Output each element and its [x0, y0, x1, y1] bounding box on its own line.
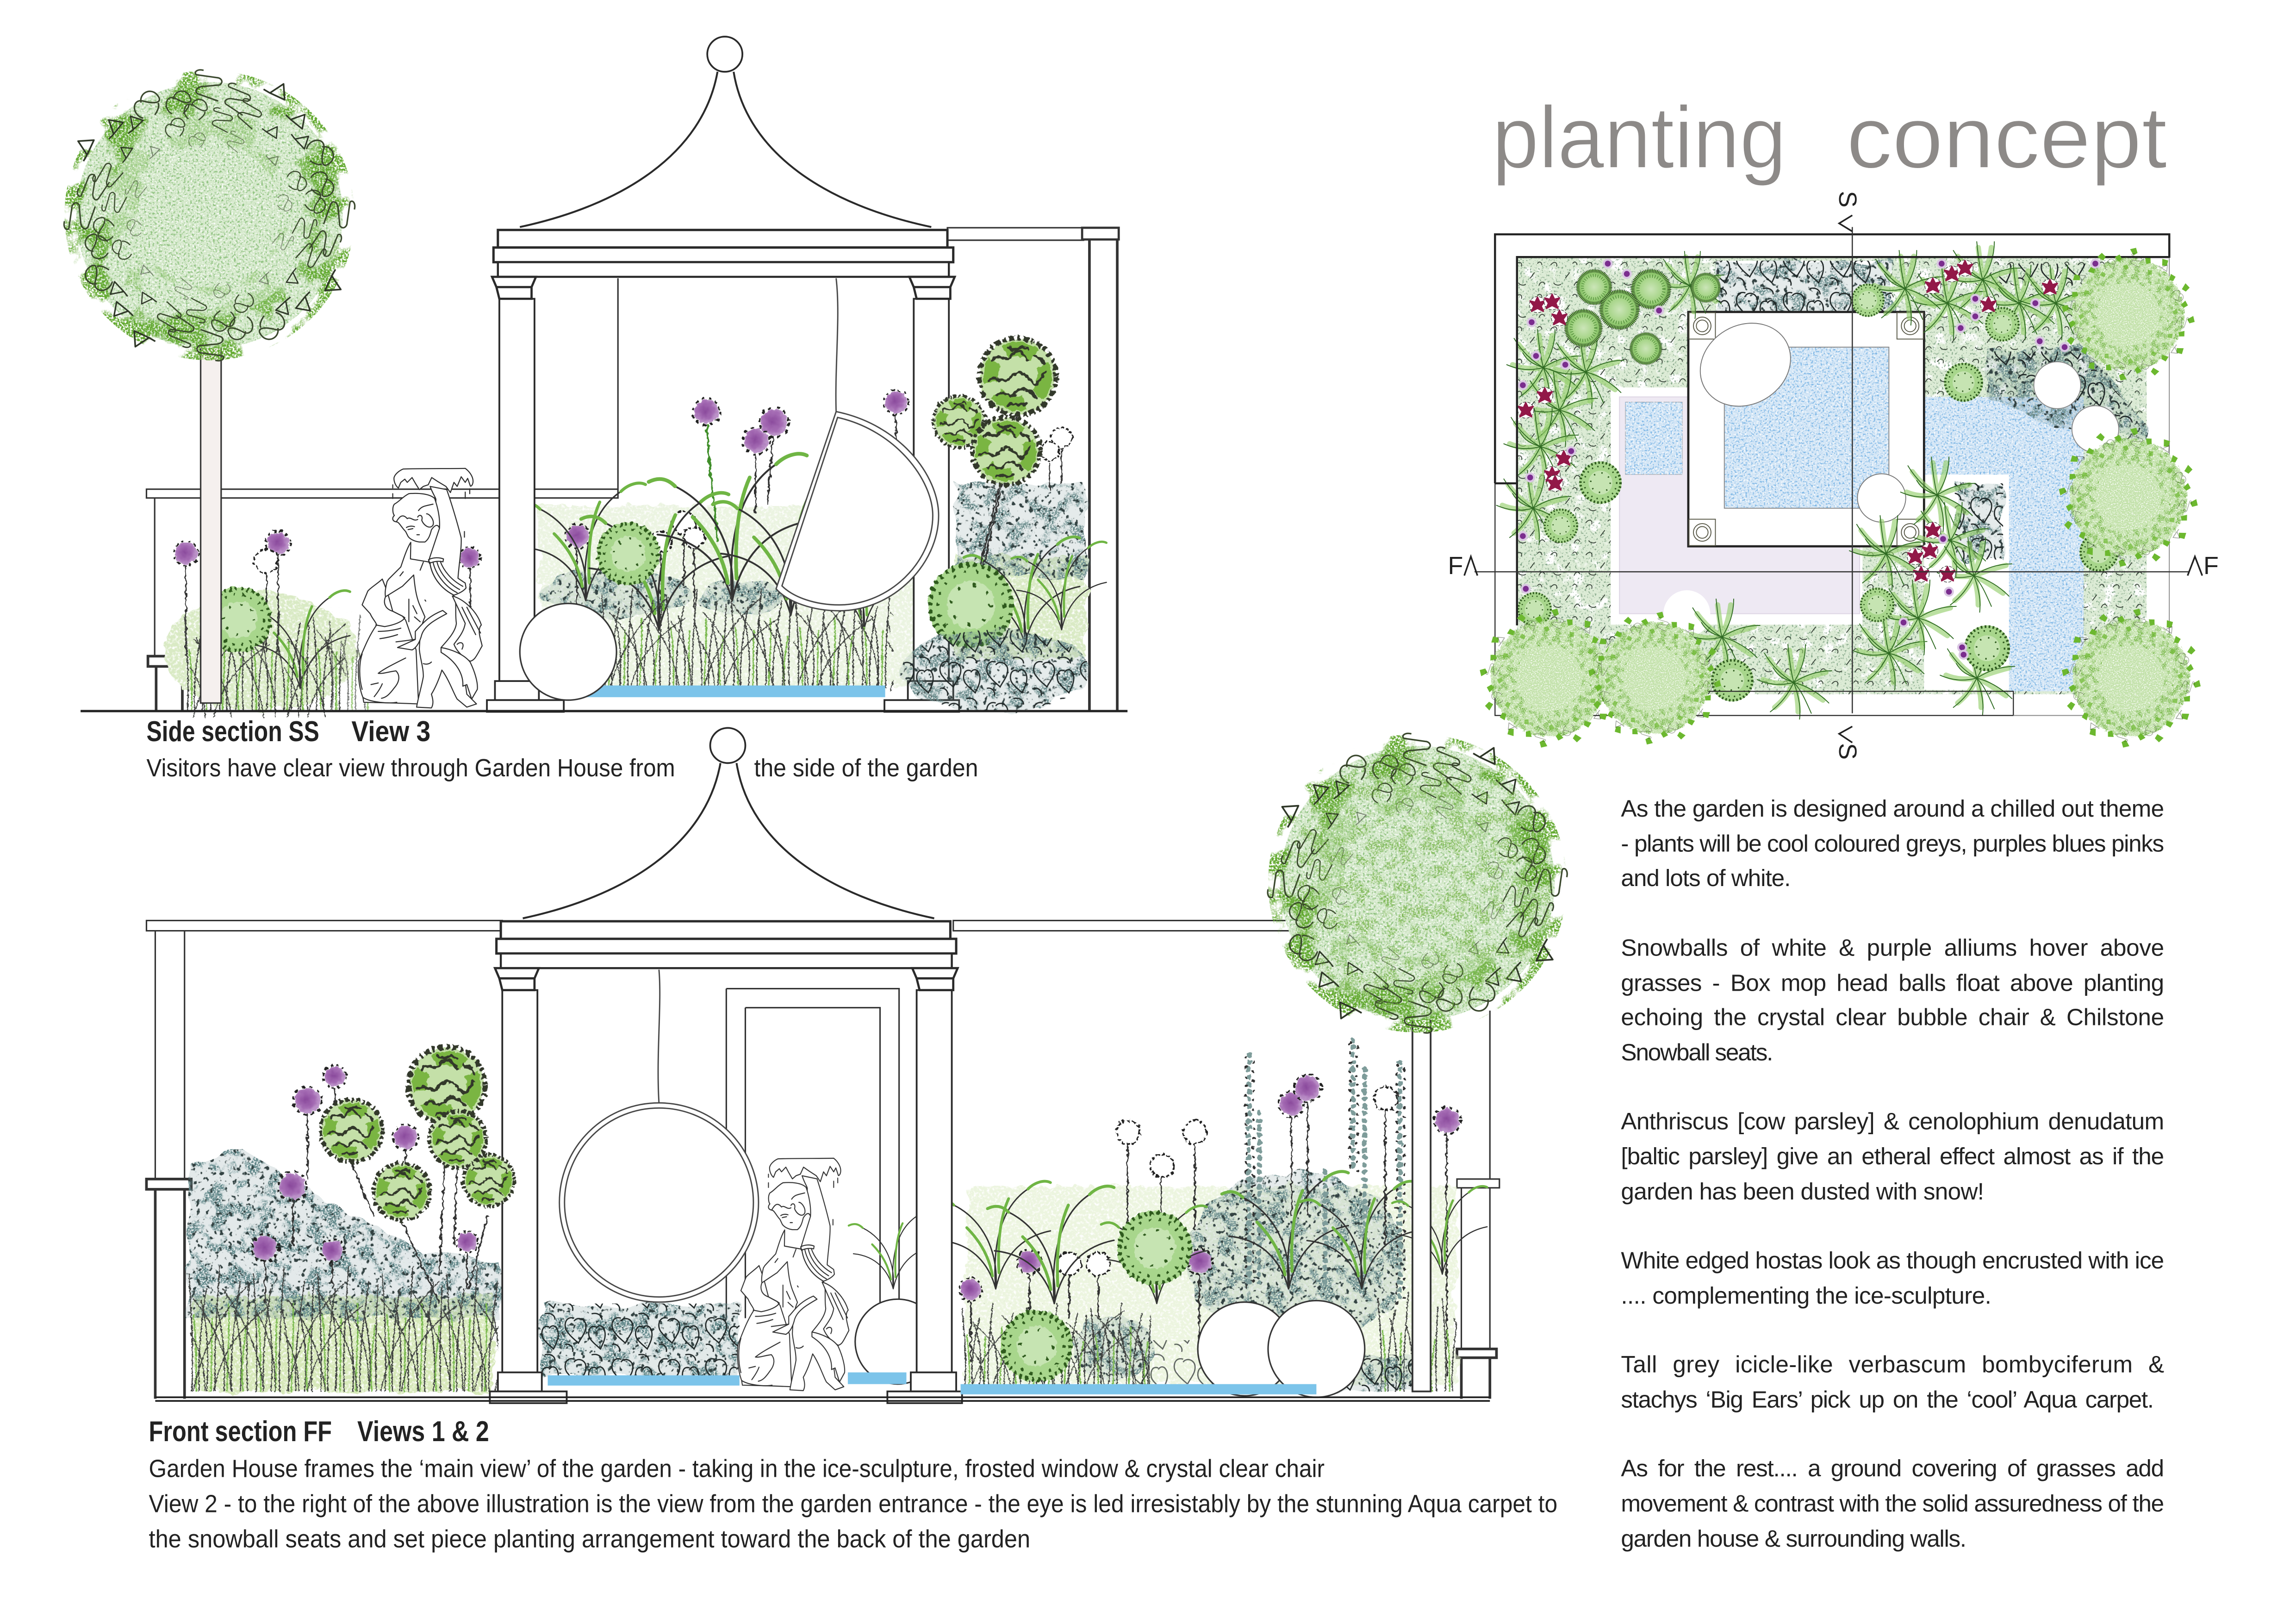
box topiary balls — [206, 338, 1056, 652]
paragraph: theme: and lots of white. — [1621, 865, 1791, 891]
description text — [1621, 795, 2164, 1552]
verbascum spires — [1246, 1040, 1404, 1304]
arching grasses — [849, 1172, 1487, 1304]
topiary balls plan — [1518, 269, 2118, 701]
plan trees — [1472, 240, 2209, 756]
section lines — [1475, 227, 2189, 713]
grey foliage left border — [187, 1150, 501, 1318]
spiky plants — [1496, 242, 2094, 719]
small aqua pad — [1625, 402, 1682, 475]
central garden house plan — [1685, 307, 1924, 546]
title — [1492, 88, 2167, 187]
section markers — [1448, 191, 2219, 760]
ground line — [81, 711, 1127, 712]
panel: front section FF drawing — [146, 716, 1584, 1403]
bubble chair front view — [560, 969, 759, 1302]
front section caption: Garden House frames the ‘main view’ of the garden - taking in the ice-sculpture, frosted window & crystal clear chair — [149, 1455, 1325, 1483]
snowball seats — [1198, 1300, 1365, 1397]
ground line — [155, 1397, 1490, 1401]
paragraph: verbascum — [1621, 1351, 2164, 1412]
title: concept — [1847, 88, 2167, 187]
section markers: S — [1834, 743, 1861, 760]
side section caption: the side of the garden — [754, 754, 978, 782]
snowball seat behind column — [855, 1299, 940, 1384]
heading: side section: Side section SS — [146, 716, 319, 748]
paragraph: grasses: As for the rest.... a ground covering of grasses add — [1621, 1455, 2164, 1481]
standard tree — [1251, 716, 1584, 1392]
paragraph: grasses: movement & contrast with the solid assuredness of the — [1621, 1490, 2164, 1517]
snowball seats plan — [1663, 362, 2119, 637]
paragraph: grasses — [1621, 1455, 2164, 1552]
topiary balls — [320, 1047, 1192, 1382]
tall stems and alliums — [174, 390, 1072, 656]
arching grasses — [244, 454, 1107, 688]
paragraph: theme — [1621, 795, 2164, 891]
ground grasses — [187, 1262, 1457, 1392]
paragraph: parsley: [baltic parsley] give an etheral effect almost as if the — [1621, 1143, 2164, 1169]
side section wall — [146, 228, 1119, 712]
section markers: F — [1448, 552, 1463, 580]
hostas — [541, 1304, 1413, 1392]
stems and alliums — [251, 1065, 1461, 1377]
planting ground — [1517, 258, 2147, 694]
section markers: F — [2203, 552, 2219, 580]
panel: side section SS drawing — [47, 37, 1127, 718]
front section caption: the snowball seats and set piece planting arrangement toward the back of the garden — [149, 1525, 1030, 1553]
ice sculpture — [737, 1158, 849, 1391]
paragraph: hostas: White edged hostas look as though encrusted with ice — [1621, 1247, 2164, 1274]
side section planting wash — [164, 506, 1087, 710]
paragraph: verbascum: stachys ‘Big Ears’ pick up on the ‘cool’ Aqua carpet. — [1621, 1386, 2154, 1412]
front section caption — [149, 1455, 1557, 1553]
section markers: S — [1834, 191, 1861, 207]
paragraph: verbascum: Tall grey icicle-like verbascum bombyciferum & — [1621, 1351, 2164, 1377]
lilac terrace — [1619, 397, 1860, 614]
side section caption — [146, 754, 978, 782]
pavilion — [487, 37, 959, 712]
paragraph: parsley: Anthriscus [cow parsley] & cenolophium denudatum — [1621, 1108, 2164, 1134]
paragraph: grasses: garden house & surrounding walls. — [1621, 1525, 1966, 1552]
title: planting — [1492, 88, 1786, 187]
paragraph: hostas — [1621, 1247, 2164, 1309]
heading: front section: Front section FF — [149, 1416, 332, 1448]
ice sculpture — [358, 468, 482, 708]
paragraph: snowballs: Snowball seats. — [1621, 1039, 1773, 1066]
paragraph: snowballs: Snowballs of white & purple alliums hover above — [1621, 934, 2164, 961]
hostas — [902, 630, 1089, 712]
paragraph: snowballs — [1621, 934, 2164, 1066]
paragraph: snowballs: echoing the crystal clear bubble chair & Chilstone — [1621, 1004, 2164, 1031]
snowball seat — [520, 603, 616, 700]
front section walls — [146, 920, 1500, 1399]
paragraph: theme: As the garden is designed around a chilled out theme — [1621, 795, 2164, 822]
front section planting wash — [193, 1187, 1457, 1392]
plan boundary walls — [1495, 234, 2169, 716]
standard tree — [47, 53, 372, 703]
magenta flowers and purple dots — [1518, 259, 2100, 660]
heading: front section — [149, 1416, 489, 1448]
heading: side section: View 3 — [351, 716, 430, 748]
paragraph: parsley — [1621, 1108, 2164, 1205]
aqua carpet — [578, 686, 885, 697]
paragraph: hostas: .... complementing the ice-sculpture. — [1621, 1282, 1991, 1309]
heading: front section: Views 1 & 2 — [357, 1416, 489, 1448]
grey foliage right border — [1072, 1172, 1406, 1380]
front section caption: View 2 - to the right of the above illustration is the view from the garden entrance - the eye is led irresistably by the stunning Aqua carpet to — [149, 1490, 1557, 1518]
paragraph: snowballs: grasses - Box mop head balls float above planting — [1621, 969, 2164, 996]
side section caption: Visitors have clear view through Garden House from — [146, 754, 675, 782]
grey foliage — [539, 483, 1087, 617]
paragraph: theme: - plants will be cool coloured greys, purples blues pinks — [1621, 831, 2164, 857]
aqua carpet — [548, 1372, 1316, 1394]
bubble chair side view — [776, 278, 939, 611]
paragraph: parsley: garden has been dusted with snow! — [1621, 1178, 1984, 1205]
blue aqua carpet L — [1924, 397, 2084, 691]
white paving — [1611, 387, 2012, 690]
panel: garden plan — [1448, 191, 2219, 760]
hosta clusters — [1716, 261, 2147, 560]
pavilion — [490, 728, 962, 1403]
ground grasses — [183, 586, 893, 718]
